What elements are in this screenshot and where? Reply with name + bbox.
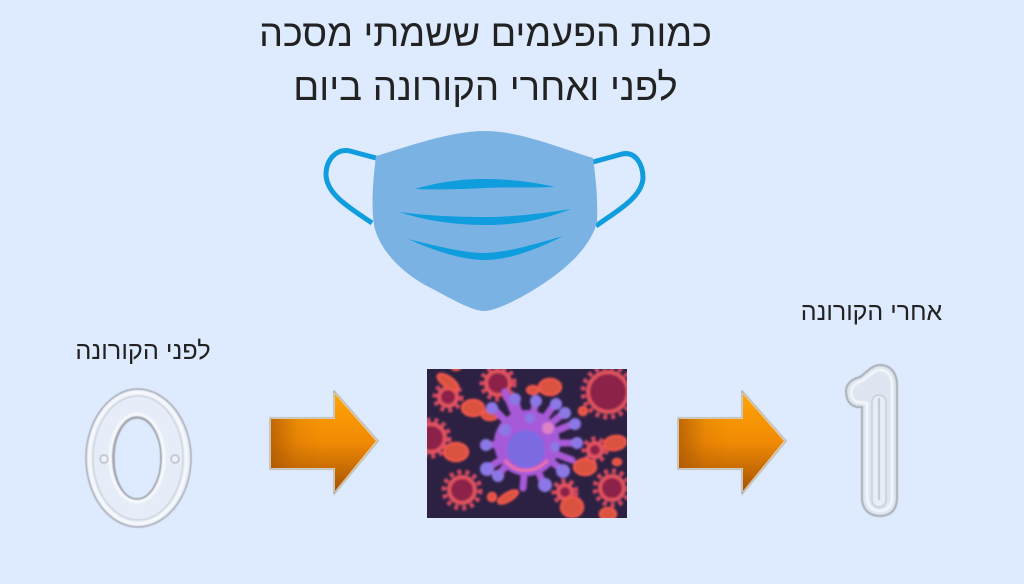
- arrow: right: [678, 391, 786, 494]
- title: [259, 12, 712, 109]
- red blood cells: [435, 362, 627, 520]
- icon: glass number one: [846, 365, 897, 516]
- image: coronavirus micrograph: [427, 369, 627, 518]
- purple virus: [480, 392, 583, 492]
- title: לפני ואחרי הקורונה ביום: [293, 66, 678, 109]
- icon: face mask: [326, 131, 643, 311]
- label: after corona: אחרי הקורונה: [801, 298, 943, 326]
- mask body: [373, 131, 597, 311]
- red virus spikes: [413, 367, 633, 508]
- mask ear loops: [326, 151, 643, 226]
- title: כמות הפעמים ששמתי מסכה: [259, 12, 712, 54]
- red viruses: [417, 371, 628, 503]
- mask pleats: [399, 179, 571, 260]
- arrow: left: [270, 391, 378, 494]
- icon: glass number zero: [86, 389, 191, 527]
- label: before corona: לפני הקורונה: [75, 337, 211, 365]
